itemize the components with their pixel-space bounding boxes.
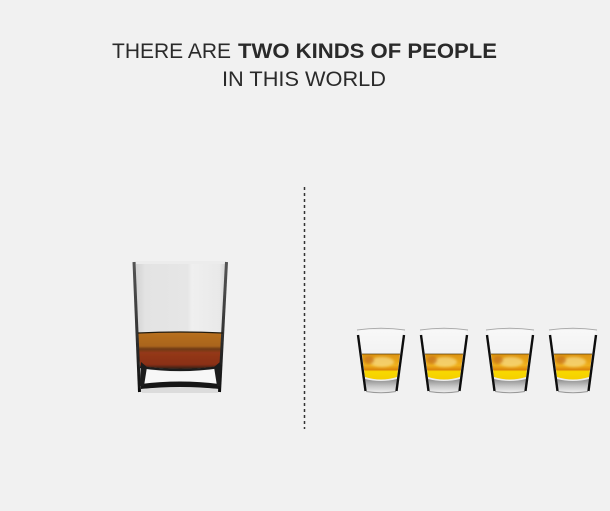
title: TWO KINDS OF PEOPLE bbox=[238, 40, 497, 63]
icon: large whisky glass bbox=[134, 261, 227, 393]
title: THERE ARE bbox=[112, 40, 231, 63]
title: IN THIS WORLD bbox=[222, 68, 386, 91]
icon: shot glass 1 bbox=[357, 328, 405, 393]
divider: dashed vertical line bbox=[304, 187, 306, 429]
icon: shot glass 4 bbox=[549, 328, 597, 393]
icon: shot glass 2 bbox=[420, 328, 468, 393]
title bbox=[112, 40, 497, 91]
icon: shot glass 3 bbox=[486, 328, 534, 393]
